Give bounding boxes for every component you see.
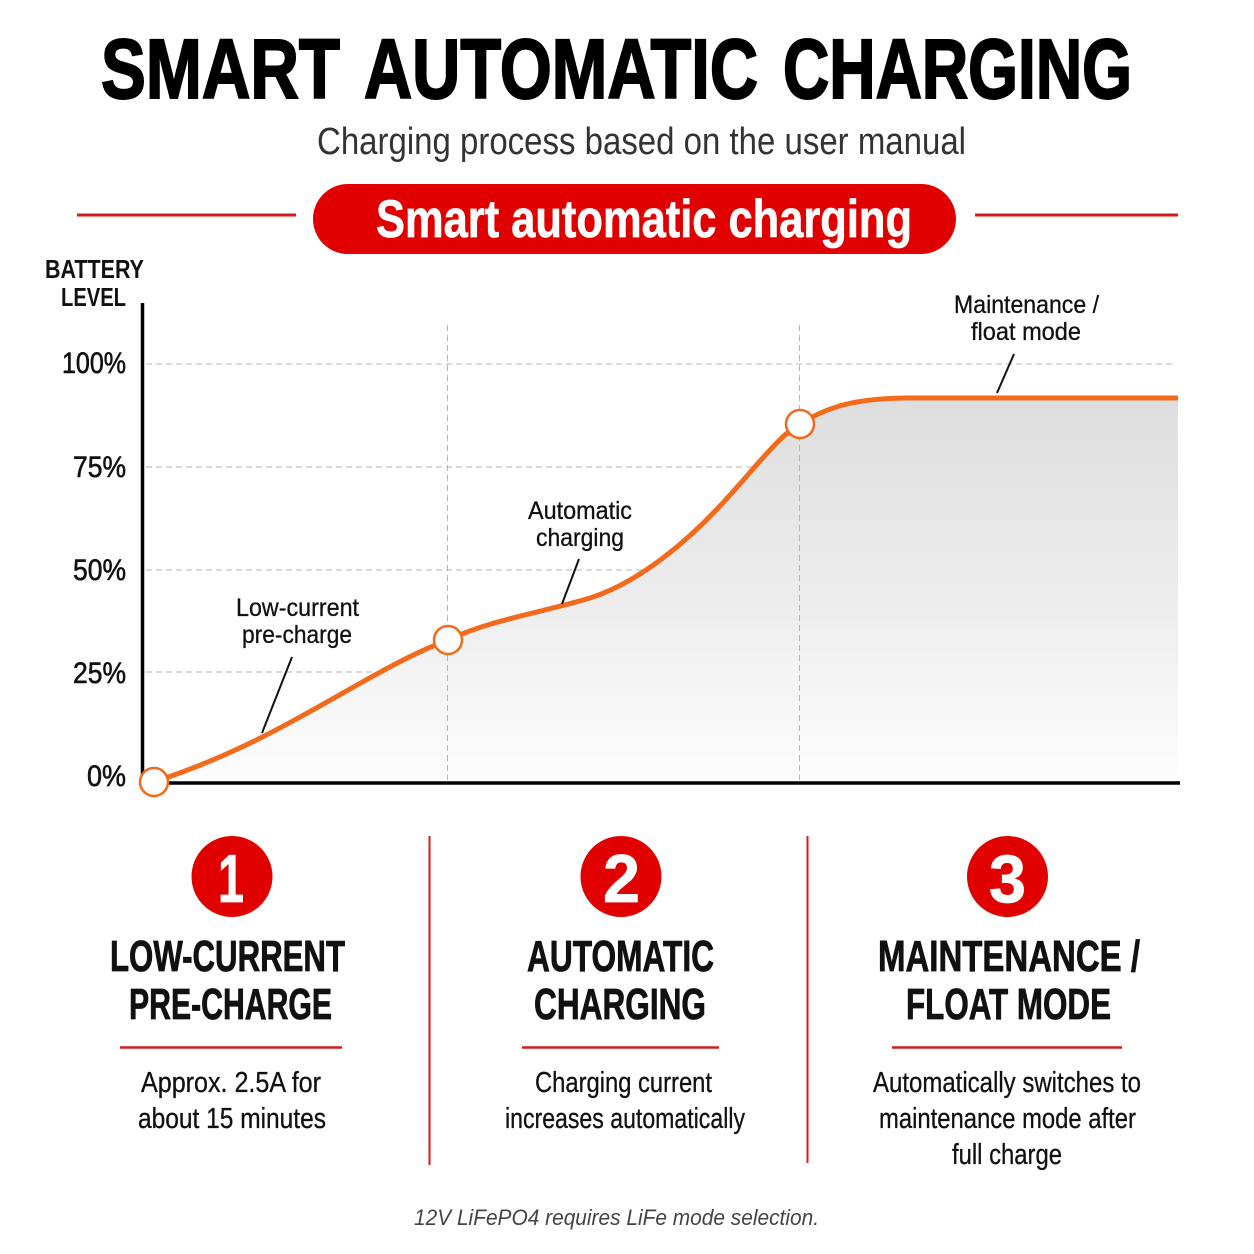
heading: MAINTENANCE /	[878, 932, 1140, 981]
y axis tick labels: 0%	[87, 760, 126, 793]
annotation: automatic charging: Automatic	[528, 497, 632, 525]
y axis tick labels	[62, 347, 126, 793]
annotation: maintenance / float mode	[954, 291, 1099, 393]
axes	[142, 303, 1180, 783]
annotation: low-current pre-charge	[236, 594, 359, 733]
annotation: automatic charging: charging	[536, 524, 624, 552]
y axis title: BATTERY	[45, 254, 144, 284]
y axis tick labels: 25%	[73, 657, 126, 690]
subtitle: Charging process based on the user manual	[317, 121, 966, 163]
title: CHARGING	[783, 22, 1132, 116]
title: SMART	[101, 22, 340, 116]
annotation: maintenance / float mode: Maintenance /	[954, 291, 1099, 319]
heading: CHARGING	[534, 980, 706, 1029]
annotation: automatic charging	[528, 497, 632, 604]
description	[505, 1067, 745, 1135]
annotation: maintenance / float mode: float mode	[971, 318, 1081, 346]
description: full charge	[952, 1139, 1062, 1171]
banner: smart automatic charging: Smart automatic charging	[376, 190, 912, 249]
panel: step 1	[110, 836, 345, 1135]
title	[101, 22, 1132, 116]
icon: number 2: 2	[603, 841, 640, 917]
curve markers	[140, 410, 814, 796]
panel: step 3	[873, 836, 1141, 1171]
title: AUTOMATIC	[364, 22, 758, 116]
footnote: 12V LiFePO4 requires LiFe mode selection.	[414, 1205, 819, 1230]
y axis title: LEVEL	[61, 282, 126, 312]
icon: number 2	[580, 836, 662, 917]
y axis title	[45, 254, 144, 312]
column dividers	[430, 836, 808, 1165]
icon: number 3: 3	[989, 841, 1026, 917]
annotation: low-current pre-charge: pre-charge	[242, 621, 352, 649]
panel: step 2	[505, 836, 745, 1135]
icon: number 3	[967, 836, 1048, 917]
description	[873, 1067, 1141, 1171]
y axis tick labels: 50%	[73, 554, 126, 587]
heading	[110, 932, 345, 1029]
heading: LOW-CURRENT	[110, 932, 345, 981]
description: maintenance mode after	[879, 1103, 1136, 1135]
heading: AUTOMATIC	[527, 932, 714, 981]
description: Automatically switches to	[873, 1067, 1141, 1099]
banner: smart automatic charging	[77, 184, 1178, 254]
shaded area under curve	[154, 398, 1178, 782]
heading	[878, 932, 1140, 1029]
annotation: low-current pre-charge: Low-current	[236, 594, 359, 622]
chart: battery level curve	[45, 254, 1180, 796]
description: Approx. 2.5A for	[141, 1067, 321, 1099]
description: increases automatically	[505, 1103, 745, 1135]
y axis tick labels: 75%	[73, 451, 126, 484]
description: about 15 minutes	[138, 1103, 326, 1135]
heading: FLOAT MODE	[906, 980, 1111, 1029]
heading: PRE-CHARGE	[129, 980, 332, 1029]
orange curve	[154, 398, 1178, 782]
description: Charging current	[535, 1067, 712, 1099]
y axis tick labels: 100%	[62, 347, 126, 380]
heading	[527, 932, 714, 1029]
description	[138, 1067, 326, 1135]
icon: number 1: 1	[218, 841, 244, 917]
icon: number 1	[192, 836, 272, 917]
